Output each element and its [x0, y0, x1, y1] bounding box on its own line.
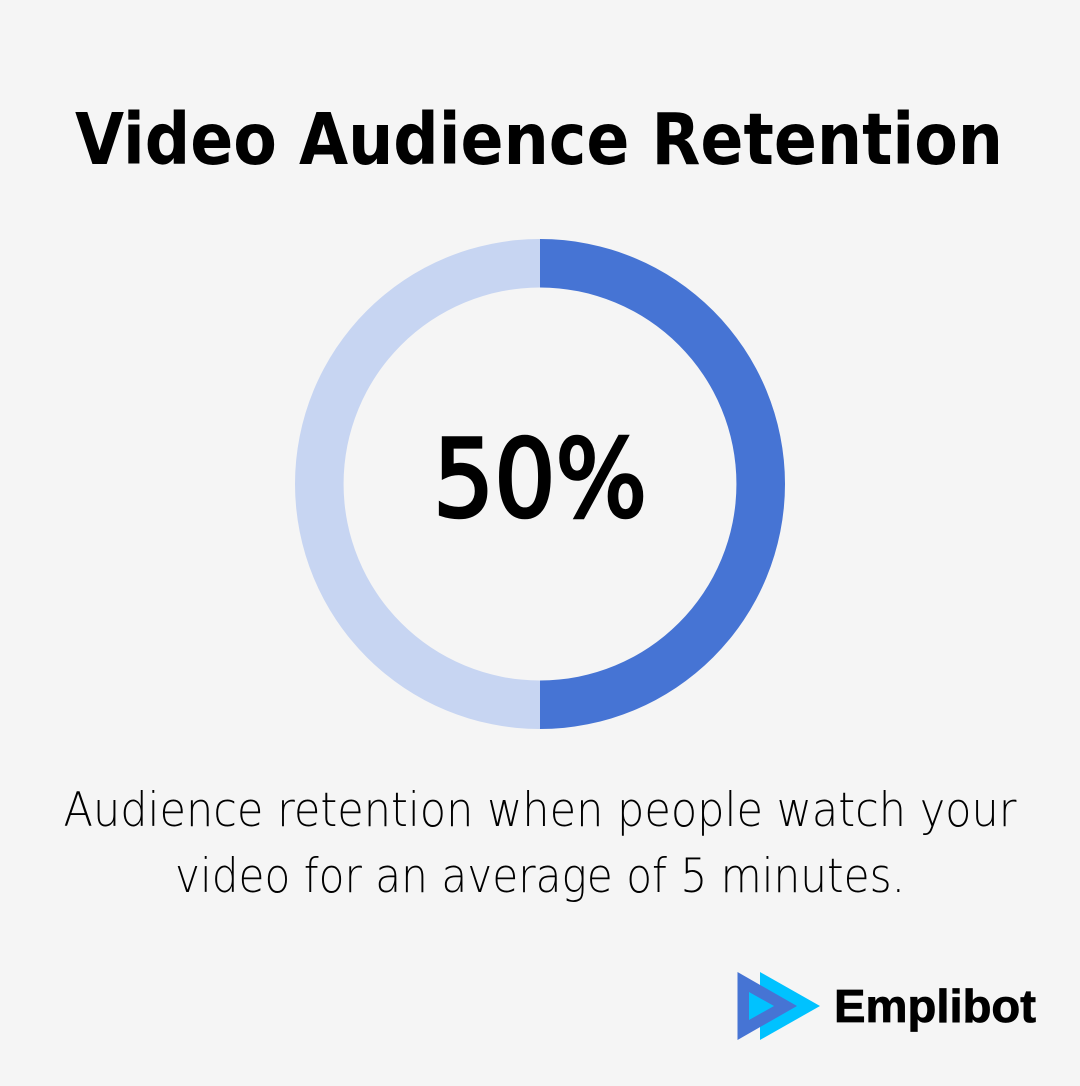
description text — [64, 783, 1017, 904]
description text: video for an average of 5 minutes. — [175, 849, 905, 904]
description text: Audience retention when people watch your — [64, 783, 1017, 838]
brand name: Emplibot — [834, 980, 1036, 1032]
center value: 50% — [433, 418, 647, 542]
donut value segment — [540, 239, 785, 729]
logo — [738, 972, 1036, 1040]
donut remainder segment — [295, 239, 540, 729]
donut chart — [295, 239, 785, 729]
icon: play triangles — [738, 972, 820, 1040]
